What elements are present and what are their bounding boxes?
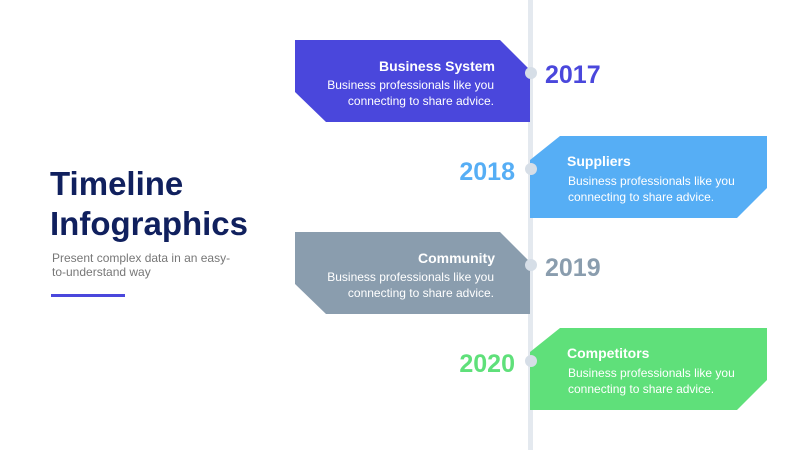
item: 2019 Community: Business professionals like you bbox=[327, 270, 494, 284]
item: 2020 Competitors: Business professionals like you bbox=[568, 366, 735, 380]
title: Timeline bbox=[50, 165, 183, 202]
item: 2020 Competitors: connecting to share advice. bbox=[568, 382, 714, 396]
subtitle: Present complex data in an easy- bbox=[52, 251, 230, 265]
title: Infographics bbox=[50, 205, 248, 242]
title bbox=[50, 165, 248, 242]
item: 2019 Community: connecting to share advice. bbox=[348, 286, 494, 300]
item: 2017 Business System: Business System bbox=[379, 58, 495, 74]
item: 2019 Community: Community bbox=[418, 250, 495, 266]
accent underline bbox=[51, 294, 125, 297]
subtitle: to-understand way bbox=[52, 265, 151, 279]
item: 2017 Business System: connecting to share advice. bbox=[348, 94, 494, 108]
item: 2017 Business System: Business professionals like you bbox=[327, 78, 494, 92]
item: 2019 Community bbox=[295, 232, 601, 314]
item: 2019 Community: 2019 bbox=[545, 254, 601, 282]
item: 2018 Suppliers bbox=[459, 136, 767, 218]
subtitle bbox=[52, 251, 230, 279]
item: 2018 Suppliers: Business professionals like you bbox=[568, 174, 735, 188]
item: 2018 Suppliers: 2018 bbox=[459, 158, 515, 186]
item: 2017 Business System: 2017 bbox=[545, 61, 601, 89]
item: 2020 Competitors: 2020 bbox=[459, 350, 515, 378]
item: 2018 Suppliers: Suppliers bbox=[567, 153, 631, 169]
item: 2020 Competitors bbox=[459, 328, 767, 410]
item: 2017 Business System bbox=[295, 40, 601, 122]
item: 2020 Competitors: Competitors bbox=[567, 345, 650, 361]
item: 2018 Suppliers: connecting to share advice. bbox=[568, 190, 714, 204]
